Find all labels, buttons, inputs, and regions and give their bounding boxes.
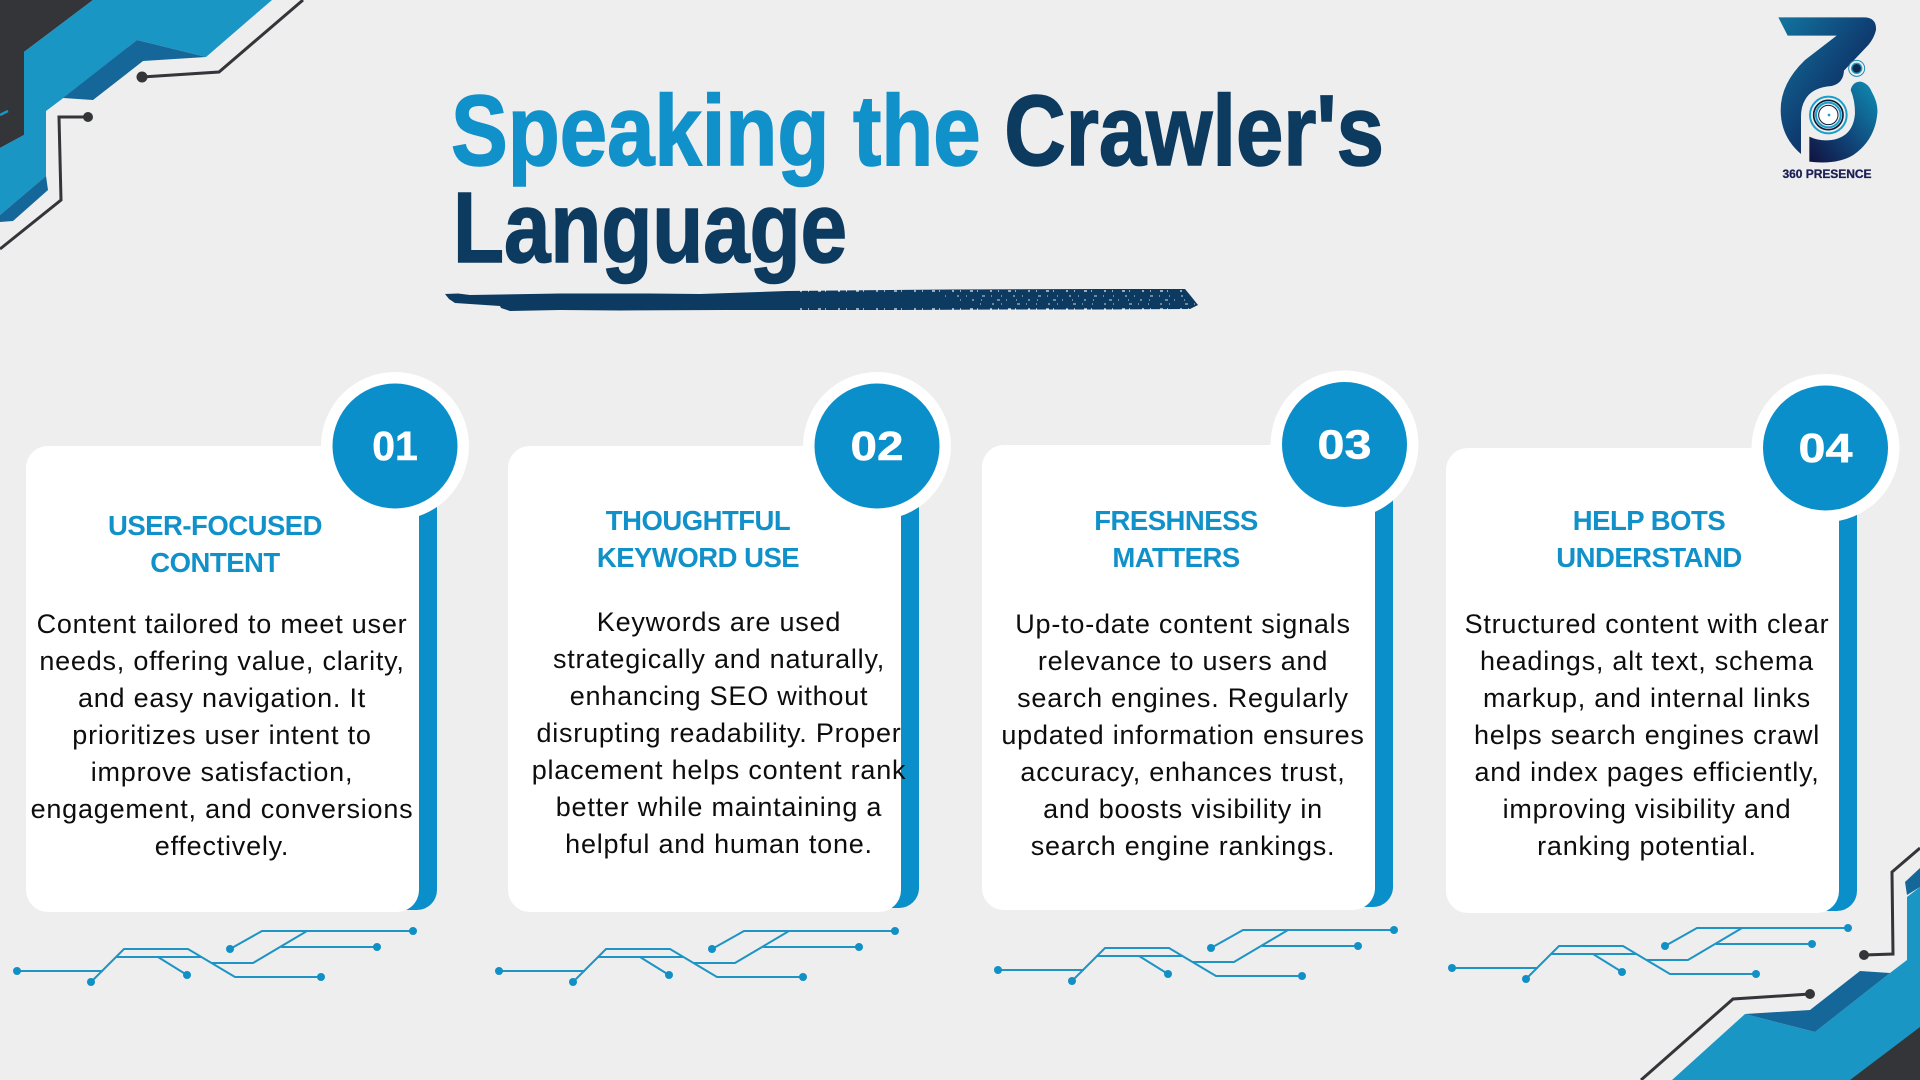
heading: user-focused content: CONTENT [150,547,280,578]
panel: card 1 [26,372,469,912]
circuit decoration under card 4 [1448,924,1852,983]
number badge 02: 02 [850,423,904,469]
body text card 1: effectively. [155,831,289,861]
body text card 4: markup, and internal links [1483,683,1811,713]
decoration: bottom-right corner [1641,848,1920,1080]
circuit decoration under card 1 [13,927,417,986]
panel: card 3 [982,370,1418,910]
heading: user-focused content [108,510,322,578]
body text card 3: relevance to users and [1038,646,1328,676]
heading: freshness matters [1094,505,1258,573]
body text card 2: enhancing SEO without [570,681,868,711]
body text card 1: Content tailored to meet user [37,609,407,639]
heading: freshness matters: MATTERS [1112,542,1240,573]
body text card 4: improving visibility and [1503,794,1791,824]
title [451,75,1384,284]
number badge 03 [1270,370,1418,518]
title: Language [453,172,847,284]
body text card 4: helps search engines crawl [1474,720,1820,750]
panel: card 2 [508,372,951,912]
body text card 2 [532,607,906,859]
number badge 02 [803,372,951,520]
body text card 4: and index pages efficiently, [1474,757,1820,787]
body text card 3: accuracy, enhances trust, [1020,757,1346,787]
body text card 3: Up-to-date content signals [1015,609,1351,639]
body text card 1: needs, offering value, clarity, [39,646,405,676]
body text card 3 [1001,609,1365,861]
heading: thoughtful keyword use: KEYWORD USE [597,542,799,573]
body text card 3: updated information ensures [1001,720,1365,750]
body text card 2: placement helps content rank [532,755,906,785]
body text card 2: strategically and naturally, [553,644,885,674]
body text card 2: disrupting readability. Proper [536,718,902,748]
body text card 4: ranking potential. [1537,831,1757,861]
decoration: top-left corner [0,0,303,249]
body text card 1 [31,609,413,861]
body text card 1: engagement, and conversions [31,794,413,824]
heading: thoughtful keyword use [597,505,799,573]
circuit decoration under card 2 [495,927,899,986]
heading: thoughtful keyword use: THOUGHTFUL [606,505,790,536]
number badge 04: 04 [1798,425,1853,471]
number badge 01: 01 [372,423,418,469]
number badge 03: 03 [1318,422,1372,468]
body text card 4 [1465,609,1829,861]
heading: help bots understand [1556,505,1742,573]
body text card 3: search engine rankings. [1031,831,1335,861]
panel: card 4 [1446,374,1900,913]
body text card 3: search engines. Regularly [1017,683,1349,713]
body text card 3: and boosts visibility in [1043,794,1323,824]
body text card 1: improve satisfaction, [91,757,353,787]
body text card 1: and easy navigation. It [78,683,366,713]
body text card 1: prioritizes user intent to [72,720,372,750]
body text card 4: headings, alt text, schema [1480,646,1814,676]
heading: help bots understand: HELP BOTS [1573,505,1725,536]
body text card 2: Keywords are used [597,607,841,637]
heading: freshness matters: FRESHNESS [1094,505,1258,536]
body text card 2: better while maintaining a [556,792,882,822]
heading: help bots understand: UNDERSTAND [1556,542,1742,573]
logo: 360 Presence: 360 PRESENCE [1782,167,1872,181]
body text card 2: helpful and human tone. [565,829,873,859]
title underline brush stroke [445,289,1198,311]
number badge 04 [1752,374,1900,522]
circuit decoration under card 3 [994,926,1398,985]
logo: 360 Presence [1778,17,1877,181]
number badge 01 [321,372,469,520]
heading: user-focused content: USER-FOCUSED [108,510,322,541]
title: Speaking the Crawler's [451,75,1384,187]
body text card 4: Structured content with clear [1465,609,1829,639]
